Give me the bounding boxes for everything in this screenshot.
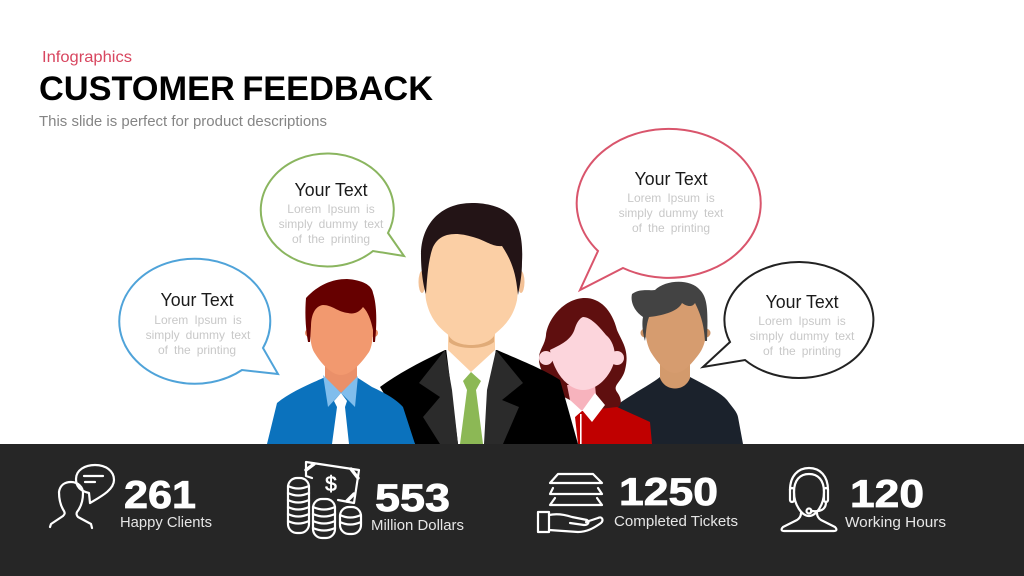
speech bubble: green: of the printing: [292, 232, 370, 246]
stat: million dollars: [288, 462, 464, 538]
speech bubble: black: Your Text: [766, 292, 838, 312]
speech bubble: red: simply dummy text: [619, 206, 724, 220]
icon: person with speech bubble: [50, 465, 114, 528]
icon: headset agent: [782, 468, 836, 531]
stat: happy clients: Happy Clients: [120, 515, 212, 531]
person: man in blue shirt: [267, 279, 415, 444]
stat: happy clients: [50, 465, 212, 531]
speech bubble: red: [577, 129, 761, 290]
speech bubble: green: [261, 153, 404, 266]
icon: coins and banknote: [288, 462, 361, 538]
speech bubble: red: of the printing: [632, 221, 710, 235]
stat: happy clients: 261: [124, 474, 196, 517]
speech bubble: blue: Your Text: [160, 290, 234, 310]
speech bubble: black: simply dummy text: [750, 329, 855, 343]
speech bubble: red: Lorem Ipsum is: [627, 191, 715, 205]
speech bubble: green: Your Text: [294, 180, 368, 200]
speech bubble: blue: [119, 259, 278, 384]
stat: completed tickets: 1250: [619, 471, 718, 514]
speech bubble: green: simply dummy text: [279, 217, 384, 231]
speech bubble: blue: simply dummy text: [146, 328, 251, 342]
speech bubble: black: of the printing: [763, 344, 841, 358]
person: woman in red: [539, 298, 652, 444]
speech bubble: blue: of the printing: [158, 343, 236, 357]
speech bubble: black: Lorem Ipsum is: [758, 314, 846, 328]
stats panel: [0, 444, 1024, 576]
stat: completed tickets: [538, 471, 738, 532]
eyebrow: Infographics: Infographics: [42, 49, 132, 66]
speech bubble: black: [703, 262, 873, 378]
person: man in dark sweater: [610, 282, 743, 444]
speech bubble: green: Lorem Ipsum is: [287, 202, 375, 216]
speech bubble: blue: Lorem Ipsum is: [154, 313, 242, 327]
title: CUSTOMER FEEDBACK: [39, 70, 433, 108]
subtitle: This slide is perfect for product descriptions: [39, 113, 327, 130]
stat: working hours: 120: [850, 473, 924, 516]
stat: completed tickets: Completed Tickets: [614, 514, 738, 530]
speech bubble: red: Your Text: [634, 169, 708, 189]
stat: working hours: [782, 468, 946, 531]
header block: [39, 49, 433, 130]
person: central man in black suit: [380, 203, 578, 444]
icon: stacked tickets on open hand: [538, 474, 602, 532]
stat: million dollars: Million Dollars: [371, 518, 464, 534]
stat: working hours: Working Hours: [845, 515, 946, 531]
stat: million dollars: 553: [375, 477, 450, 520]
icon: coins and banknote: $: [325, 473, 337, 496]
